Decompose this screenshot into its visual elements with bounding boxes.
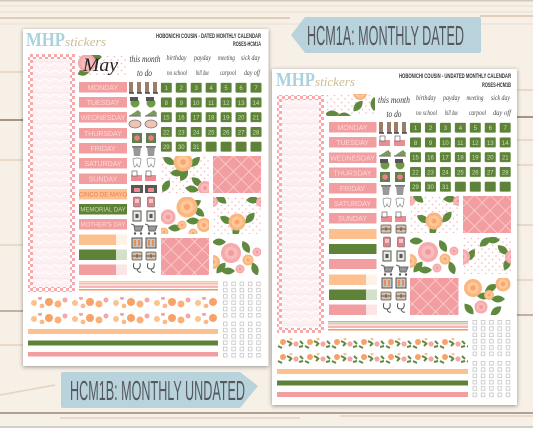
date grid: 11 [208, 101, 215, 107]
text: HCM1B: MONTHLY UNDATED [70, 375, 245, 406]
date grid: 1 [414, 126, 418, 132]
script labels: this month [378, 95, 410, 105]
floral and lattice panels [159, 152, 266, 277]
script labels: bill due [445, 109, 458, 117]
date grid: 24 [193, 130, 200, 136]
date grid [161, 83, 265, 153]
date grid: 29 [412, 185, 419, 191]
logo [276, 69, 355, 91]
weekday labels: TUESDAY [336, 140, 369, 147]
holiday labels [79, 189, 127, 230]
floral and lattice panels [403, 191, 519, 318]
date grid: 22 [412, 170, 419, 176]
arrow label: HCM1B [61, 372, 258, 408]
date grid: 23 [178, 130, 185, 136]
date grid: 19 [223, 116, 230, 122]
date grid: 5 [224, 86, 228, 92]
script labels: sick day [241, 54, 261, 62]
date grid: 2 [429, 126, 433, 132]
date grid: 1 [165, 86, 169, 92]
date grid: 15 [412, 156, 419, 162]
script labels: meeting [218, 54, 235, 62]
floral washi strips [277, 338, 468, 364]
script labels: birthday [166, 54, 187, 62]
solid colour strips [28, 329, 218, 356]
weekday labels: SATURDAY [334, 201, 371, 208]
script labels: bill due [196, 69, 209, 77]
weekday labels [79, 82, 127, 184]
script labels: carpool [469, 109, 486, 117]
script labels: birthday [416, 94, 437, 102]
weekday labels: SATURDAY [84, 161, 122, 168]
date grid: 17 [193, 116, 200, 122]
date grid: 12 [223, 101, 230, 107]
date grid: 6 [239, 86, 243, 92]
checkboxes [472, 320, 514, 398]
date grid: 20 [487, 156, 494, 162]
date grid: 13 [487, 141, 494, 147]
date grid: 30 [427, 185, 434, 191]
sheet: undated monthly calendar [272, 69, 519, 405]
logo [26, 29, 106, 51]
date grid: 12 [472, 141, 479, 147]
script labels: to do [386, 109, 402, 119]
notes panel [277, 95, 324, 333]
holiday labels: MEMORIAL DAY [80, 208, 126, 214]
blank month header sticker [326, 94, 375, 116]
script labels: day off [244, 69, 261, 77]
sheet paper [272, 69, 517, 405]
script labels: carpool [220, 69, 236, 77]
date grid: 31 [193, 145, 200, 151]
date grid: 4 [210, 86, 214, 92]
date grid: 14 [253, 101, 260, 107]
weekday labels: MONDAY [88, 85, 118, 92]
script labels [130, 54, 261, 78]
weekday labels: FRIDAY [340, 186, 365, 193]
weekday labels: SUNDAY [338, 216, 367, 223]
date grid: 2 [180, 86, 184, 92]
notes panel [28, 54, 75, 292]
date grid: 27 [487, 170, 494, 176]
date grid: 23 [427, 170, 434, 176]
date grid: 8 [414, 141, 418, 147]
month header sticker: May [82, 55, 119, 76]
date grid: 5 [474, 126, 478, 132]
logo: MHP [26, 29, 65, 51]
thin stripes [79, 281, 218, 290]
date grid: 10 [442, 141, 449, 147]
date grid: 3 [444, 126, 448, 132]
date grid: 3 [195, 86, 199, 92]
date grid: 7 [254, 86, 258, 92]
date grid [410, 123, 514, 193]
script labels: sick day [491, 94, 511, 102]
icon columns [379, 122, 408, 312]
date grid: 15 [163, 116, 170, 122]
month header sticker [78, 55, 126, 77]
weekday labels [329, 122, 376, 224]
date grid: 14 [502, 141, 509, 147]
date grid: 9 [429, 141, 433, 147]
date grid: 30 [178, 145, 185, 151]
date grid: 27 [238, 130, 245, 136]
script labels: no school [167, 69, 187, 77]
date grid: 31 [442, 185, 449, 191]
date grid: 21 [502, 156, 509, 162]
sheet title: HOBONICHI COUSIN - DATED MONTHLY CALENDAR [156, 34, 261, 40]
script labels: payday [193, 54, 212, 62]
weekday labels: THURSDAY [334, 170, 372, 178]
sheet title [399, 74, 511, 89]
date grid: 21 [253, 116, 260, 122]
date grid: 6 [489, 126, 493, 132]
script labels: no school [416, 109, 437, 117]
sheet title: ROSES-HCM1A [233, 42, 261, 48]
script labels: payday [442, 94, 461, 102]
date grid: 20 [238, 116, 245, 122]
date grid: 26 [223, 130, 230, 136]
date grid: 18 [457, 156, 464, 162]
icon columns [129, 82, 158, 272]
weekday labels: WEDNESDAY [81, 115, 126, 122]
date grid: 28 [253, 130, 260, 136]
sheet: dated monthly calendar [23, 29, 268, 366]
script labels: day off [493, 109, 512, 117]
weekday labels: FRIDAY [90, 146, 116, 153]
half colour bars [329, 274, 377, 315]
weekday labels: TUESDAY [87, 100, 120, 107]
date grid: 10 [193, 101, 200, 107]
date grid: 9 [180, 101, 184, 107]
sheet paper [23, 29, 268, 366]
sheet title: ROSES-HCM1B [482, 83, 511, 89]
date grid: 7 [504, 126, 508, 132]
date grid: 11 [457, 141, 464, 147]
date grid: 25 [208, 130, 215, 136]
date grid: 13 [238, 101, 245, 107]
script labels [378, 94, 512, 119]
weekday labels: WEDNESDAY [330, 156, 375, 162]
solid colour strips [277, 369, 468, 397]
holiday labels: CINCO DE MAYO [79, 192, 127, 198]
date grid: 28 [502, 170, 509, 176]
script labels: to do [137, 68, 152, 78]
date grid: 25 [457, 170, 464, 176]
date grid: 18 [208, 116, 215, 122]
date grid: 19 [472, 156, 479, 162]
weekday labels: MONDAY [337, 125, 368, 132]
holiday labels: MOTHER'S DAY [81, 222, 125, 228]
logo: stickers [65, 34, 106, 49]
blank holiday labels [329, 229, 376, 269]
weekday labels: SUNDAY [89, 176, 118, 184]
logo: stickers [315, 74, 355, 89]
sheet title [156, 34, 261, 48]
date grid: 8 [165, 101, 169, 107]
script labels: this month [130, 54, 161, 64]
date grid: 16 [178, 116, 185, 122]
date grid: 29 [163, 145, 170, 151]
date grid: 22 [163, 130, 170, 136]
half colour bars [79, 234, 127, 275]
floral washi strips [28, 297, 218, 324]
script labels: meeting [466, 94, 484, 102]
logo: MHP [276, 69, 315, 91]
date grid: 4 [459, 126, 463, 132]
arrow label: HCM1A [291, 17, 481, 53]
checkboxes [223, 282, 264, 358]
date grid: 24 [442, 170, 449, 176]
date grid: 26 [472, 170, 479, 176]
date grid: 17 [442, 156, 449, 162]
thin stripes [328, 321, 468, 330]
weekday labels: THURSDAY [84, 131, 122, 138]
date grid: 16 [427, 156, 434, 162]
